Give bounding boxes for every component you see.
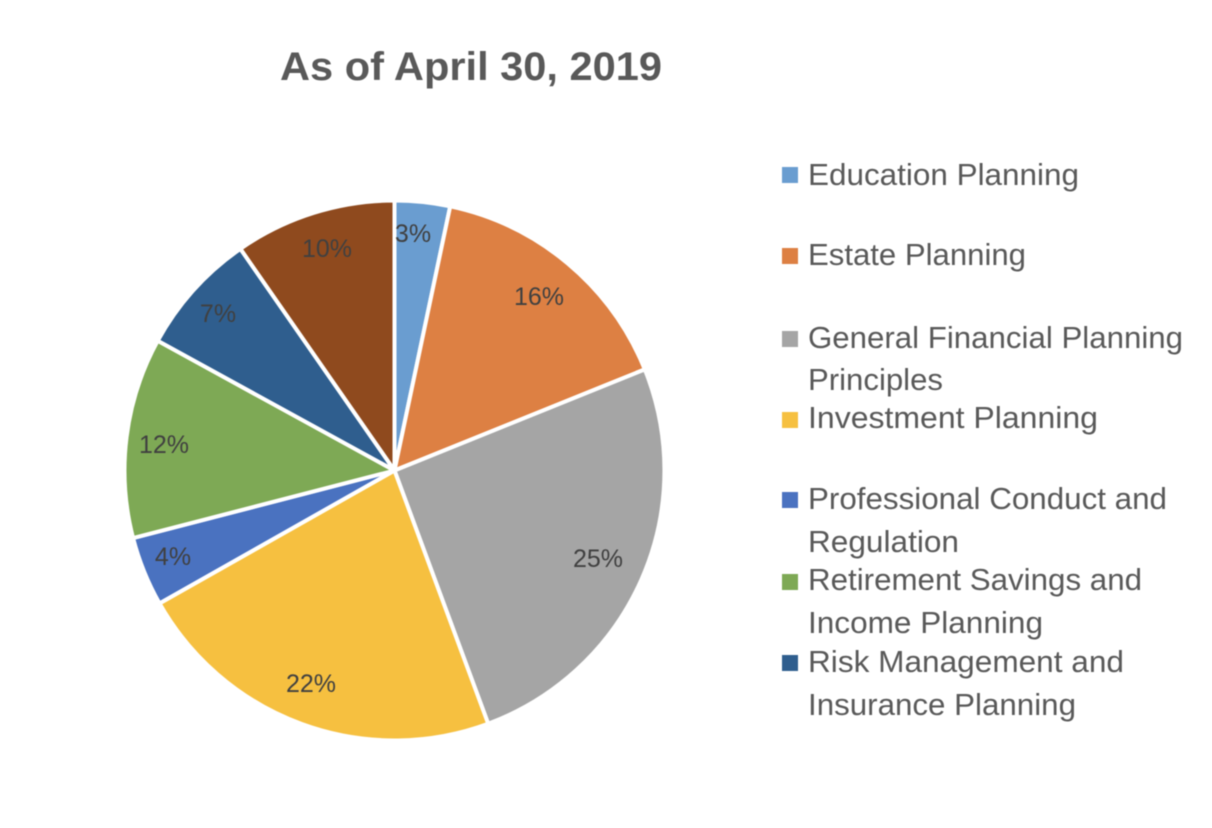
- legend item: General Financial Planning Principles: Principles: [808, 362, 943, 397]
- legend item: Retirement Savings and Income Planning: Income Planning: [808, 605, 1043, 640]
- legend item: Retirement Savings and Income Planning: Retirement Savings and: [808, 562, 1142, 597]
- percentage labels: [139, 220, 623, 698]
- label 7%: 7%: [200, 300, 236, 328]
- label 10%: 10%: [302, 235, 352, 263]
- legend item: Risk Management and Insurance Planning: Risk Management and: [808, 644, 1124, 679]
- legend item: General Financial Planning Principles: [782, 320, 1183, 397]
- legend item: Retirement Savings and Income Planning: [782, 562, 1142, 640]
- slice: Risk Management and Insurance Planning 7%: [158, 249, 394, 470]
- legend item: Professional Conduct and Regulation: Regulation: [808, 524, 959, 559]
- label 16%: 16%: [514, 283, 564, 311]
- slice: Professional Conduct and Regulation 4%: [133, 470, 394, 603]
- legend item: Risk Management and Insurance Planning: Insurance Planning: [808, 687, 1076, 722]
- pie chart: [125, 200, 664, 740]
- slice: Retirement Savings and Income Planning 12%: [125, 341, 394, 538]
- slice: brown 10%: [240, 200, 394, 470]
- label 4%: 4%: [155, 543, 191, 571]
- legend item: General Financial Planning Principles: General Financial Planning: [808, 320, 1183, 355]
- legend: [782, 157, 1183, 722]
- label 25%: 25%: [573, 545, 623, 573]
- legend item: Professional Conduct and Regulation: [782, 481, 1167, 559]
- label 12%: 12%: [139, 431, 189, 459]
- legend item: Risk Management and Insurance Planning: [782, 644, 1124, 722]
- slice: General Financial Planning Principles 25%: [394, 369, 664, 724]
- legend item: Estate Planning: Estate Planning: [808, 237, 1026, 272]
- label 3%: 3%: [395, 220, 431, 248]
- label 22%: 22%: [286, 670, 336, 698]
- slice: Education Planning 3%: [394, 200, 450, 470]
- slice: Estate Planning 16%: [394, 206, 645, 471]
- slice: Investment Planning 22%: [160, 470, 488, 740]
- legend item: Professional Conduct and Regulation: Professional Conduct and: [808, 481, 1167, 516]
- title: As of April 30, 2019: [280, 45, 662, 89]
- legend item: Investment Planning: Investment Planning: [808, 400, 1098, 435]
- legend item: Education Planning: Education Planning: [808, 157, 1079, 192]
